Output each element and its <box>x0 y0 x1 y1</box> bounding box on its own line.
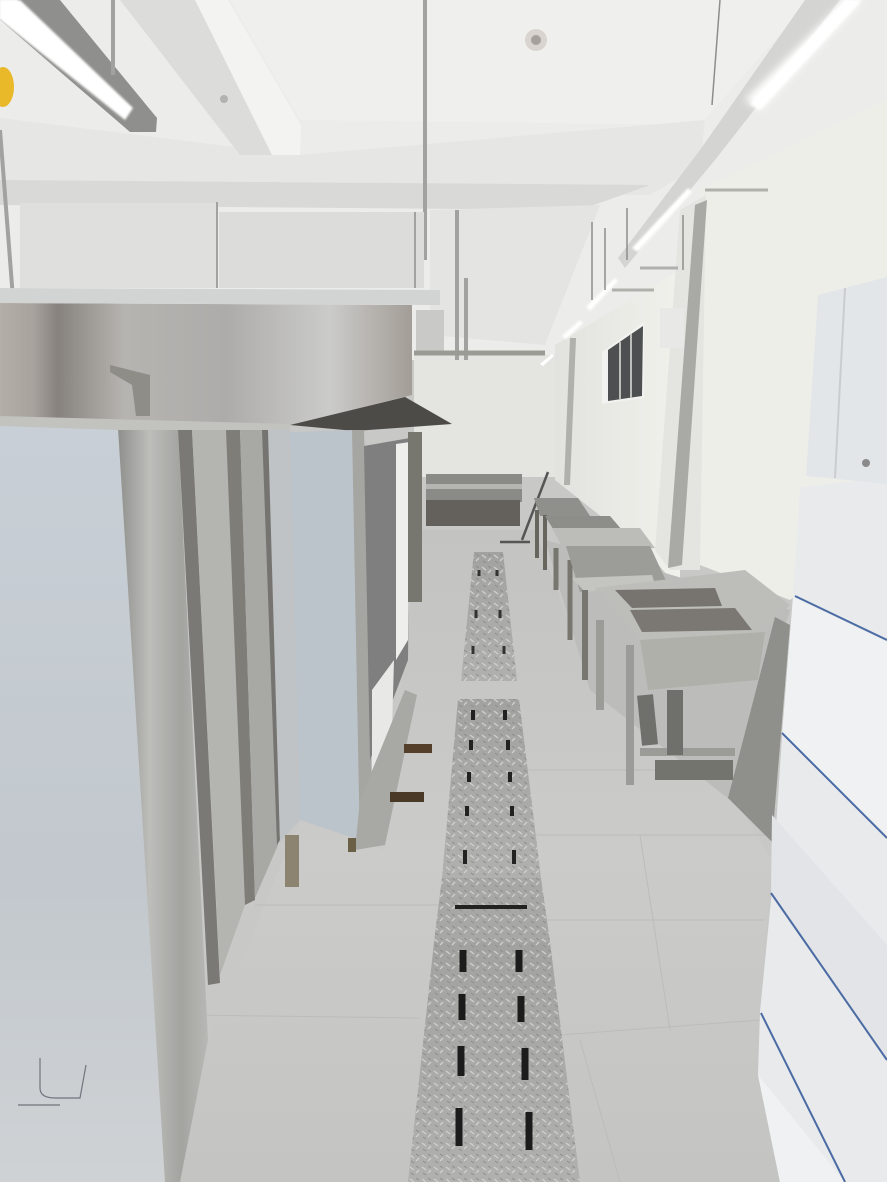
shadowed floor under sinks <box>545 540 790 800</box>
smoke detectors <box>213 29 547 110</box>
ceiling light left <box>0 0 157 132</box>
floor <box>165 530 785 1182</box>
floor drain grates <box>408 552 580 1182</box>
stove unit front <box>285 430 422 887</box>
back wall <box>414 355 556 477</box>
row of steel sinks <box>534 498 668 680</box>
handwriting scribble on panel <box>18 1058 86 1105</box>
mop <box>500 472 548 542</box>
ceiling <box>0 0 887 360</box>
yellow object <box>0 67 14 107</box>
range hood <box>0 288 452 431</box>
back sinks <box>426 474 522 526</box>
ceiling beam <box>120 0 301 155</box>
front steel sink <box>595 570 790 785</box>
wall-mounted emergency light <box>660 308 684 348</box>
floor tile joints <box>190 770 770 1182</box>
suspension rods <box>0 0 466 415</box>
stove side panel left <box>0 425 165 1182</box>
gas valves <box>390 744 432 802</box>
leaning steel racks <box>728 617 790 842</box>
white refrigerator unit <box>758 277 887 1182</box>
steel stove partitions <box>0 416 300 1182</box>
exhaust duct <box>20 202 545 353</box>
ceiling light tubes right <box>540 0 862 366</box>
right wall <box>555 100 887 600</box>
window <box>602 322 644 404</box>
